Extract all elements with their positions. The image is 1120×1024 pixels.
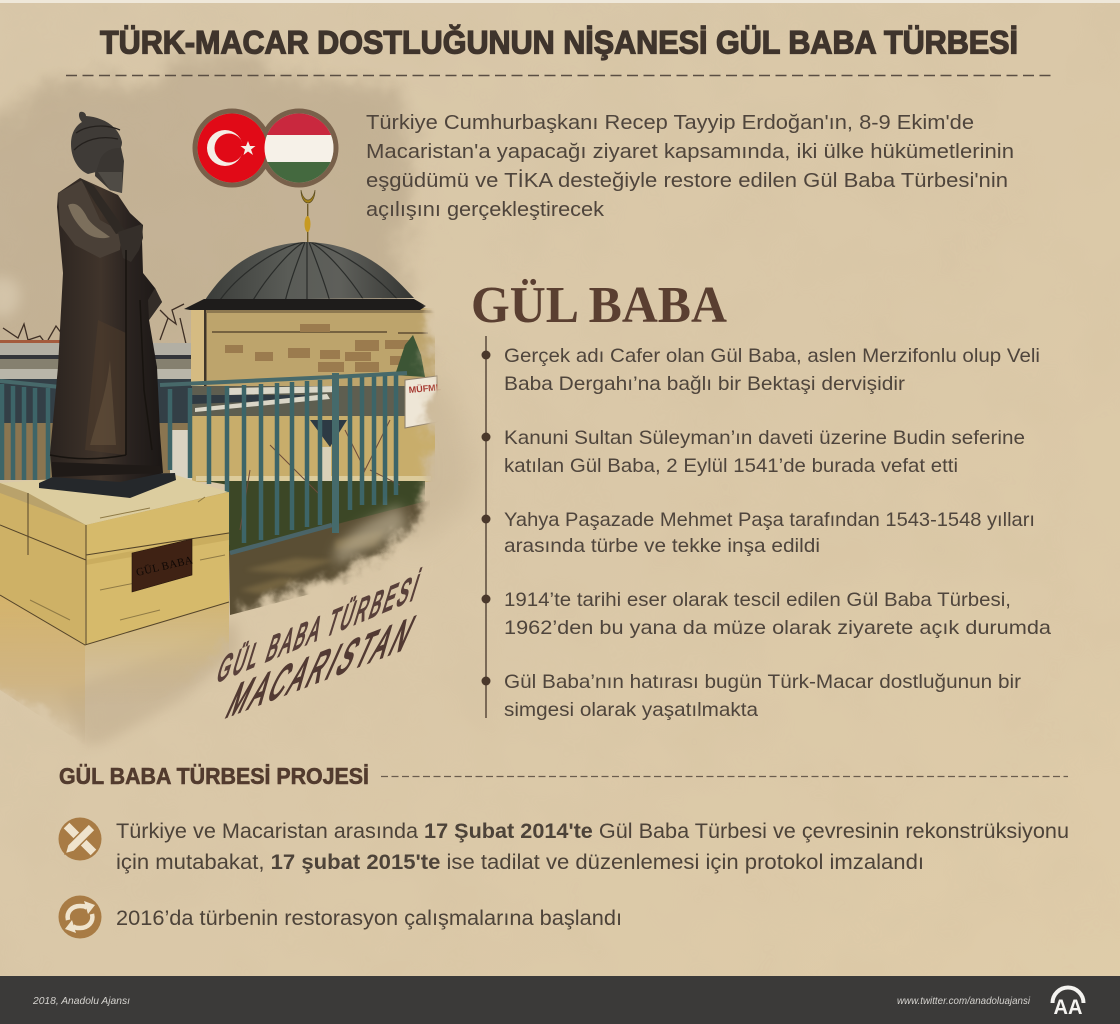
photo caption xyxy=(212,564,427,729)
fact 3: arasında türbe ve tekke inşa edildi xyxy=(504,535,820,557)
section heading: project: GÜL BABA TÜRBESİ PROJESİ xyxy=(59,763,369,789)
intro paragraph xyxy=(366,112,1014,221)
icon: fence xyxy=(0,373,407,553)
fact 2: Kanuni Sultan Süleyman’ın daveti üzerine Budin seferine xyxy=(504,427,1025,449)
photo collage: Gül Baba statue and tomb xyxy=(0,112,442,745)
intro paragraph: açılışını gerçekleştirecek xyxy=(366,199,605,221)
icon: refresh arrows xyxy=(58,896,102,938)
fact 2: katılan Gül Baba, 2 Eylül 1541’de burada vefat etti xyxy=(504,455,958,477)
intro paragraph: eşgüdümü ve TİKA desteğiyle restore edilen Gül Baba Türbesi'nin xyxy=(366,169,1008,192)
fact 1: Gerçek adı Cafer olan Gül Baba, aslen Merzifonlu olup Veli xyxy=(504,345,1040,367)
fact 5: Gül Baba’nın hatırası bugün Türk-Macar dostluğunun bir xyxy=(504,671,1022,693)
plinth xyxy=(0,475,229,745)
icon: heritage sign: MÜFML xyxy=(408,382,442,395)
title: TÜRK-MACAR DOSTLUĞUNUN NİŞANESİ GÜL BABA TÜRBESİ xyxy=(100,24,1018,60)
plaque: GÜL BABA xyxy=(135,554,194,579)
statue xyxy=(39,112,176,498)
fact 5: simgesi olarak yaşatılmakta xyxy=(504,699,758,721)
fact 4: 1962’den bu yana da müze olarak ziyarete açık durumda xyxy=(504,617,1051,639)
fact 3 xyxy=(482,509,1035,557)
timeline: Gül Baba facts xyxy=(482,336,1051,721)
fact 3: Yahya Paşazade Mehmet Paşa tarafından 1543-1548 yılları xyxy=(504,509,1035,531)
fact 4: 1914’te tarihi eser olarak tescil edilen Gül Baba Türbesi, xyxy=(504,589,1011,611)
icon: heritage sign xyxy=(405,376,442,428)
icon: Turkish and Hungarian flags xyxy=(195,111,336,186)
project text 1: için mutabakat, 17 şubat 2015'te ise tadilat ve düzenlemesi için protokol imzalandı xyxy=(116,851,924,874)
icon: finial and crescent xyxy=(301,190,315,242)
background buildings and trees xyxy=(0,304,196,480)
fact 4 xyxy=(482,589,1051,639)
footer bar xyxy=(0,976,1120,1024)
icon: ruler and pencil xyxy=(58,818,102,860)
intro paragraph: Macaristan'a yapacağı ziyaret kapsamında, iki ülke hükümetlerinin xyxy=(366,141,1014,163)
statue robe xyxy=(50,178,163,482)
project text 1 xyxy=(116,820,1069,874)
lower yard xyxy=(192,386,435,615)
footer link: www.twitter.com/anadoluajansi xyxy=(897,995,1031,1007)
plaque xyxy=(132,539,194,592)
icon: dome xyxy=(184,242,426,310)
project text 1: Türkiye ve Macaristan arasında 17 Şubat 2014'te Gül Baba Türbesi ve çevresinin rekonstrüksiyonu xyxy=(116,820,1069,843)
fact 2 xyxy=(482,427,1025,477)
project text 2: 2016’da türbenin restorasyon çalışmalarına başlandı xyxy=(116,907,622,930)
icon: Anadolu Agency logo: AA xyxy=(1054,996,1082,1019)
intro paragraph: Türkiye Cumhurbaşkanı Recep Tayyip Erdoğan'ın, 8-9 Ekim'de xyxy=(366,112,974,134)
caption line: Macaristan: MACARISTAN xyxy=(219,603,427,729)
fact 1 xyxy=(482,345,1040,395)
heading: Gül Baba: GÜL BABA xyxy=(471,277,727,334)
fact 1: Baba Dergahı’na bağlı bir Bektaşi dervişidir xyxy=(504,373,906,395)
footer credit: 2018, Anadolu Ajansı xyxy=(32,995,130,1007)
smoke over ground xyxy=(335,505,408,565)
statue base xyxy=(39,473,176,498)
fact 5 xyxy=(482,671,1022,721)
caption line: Gül Baba Türbesi: GÜL BABA TÜRBESİ xyxy=(212,564,427,692)
statue head xyxy=(95,143,124,193)
icon: tomb wall xyxy=(191,308,435,386)
